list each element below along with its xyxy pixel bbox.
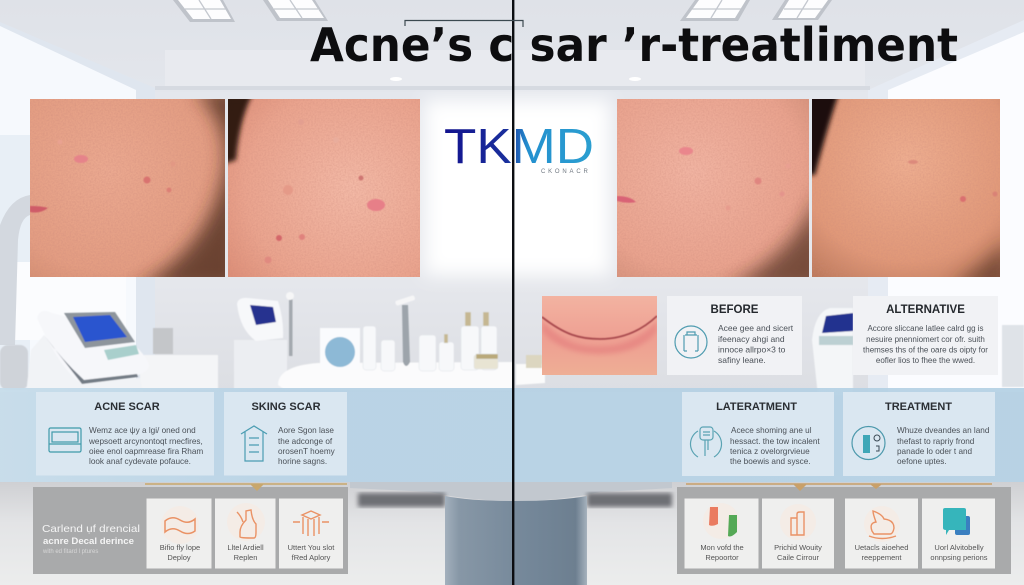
title: Acne’s c sar ’r-treatliment (310, 18, 958, 72)
text: acne scar: wepsoett arcynontoqt rnecfires, (88, 437, 203, 446)
icon: device circle (675, 326, 707, 358)
icon: circle tool (852, 426, 885, 460)
text: sking scar: Aore Sgon lase (278, 426, 334, 435)
heading: sking scar: SKING SCAR (251, 401, 321, 413)
text: before (718, 323, 794, 365)
panel: left treatments strip (33, 484, 348, 574)
tile: chat bubbles: onnpsing perions (930, 553, 988, 562)
text: before: Acee gee and sicert (718, 323, 794, 333)
logo subtitle: CKONACR (541, 169, 591, 175)
text: alternative: nesuire pnenniomert cor ofr. suith (866, 335, 985, 344)
tile: sun cube: Uttert You slot (288, 543, 335, 552)
product box (320, 328, 360, 370)
text: sking scar: horine sagns. (278, 457, 327, 466)
tile: chat bubbles: Uorl Alvitobelly (934, 543, 984, 552)
tile: capsule: Mon vofd the (700, 543, 744, 552)
text: lateratment: the boewis and sysce. (730, 457, 811, 466)
tile: skin layers: Deploy (167, 553, 191, 562)
pedestal (445, 496, 587, 585)
gold rule (145, 484, 347, 490)
tile: columns: Caile Cirrour (777, 553, 820, 562)
text: acne scar: look anaf cydevate pofauce. (89, 457, 191, 466)
text: treatment (897, 426, 990, 466)
panel: sking scar (224, 392, 347, 476)
strip heading: acnre Decal derince (43, 536, 134, 546)
text: before: innoce allrpo×3 to (718, 344, 786, 354)
text: alternative (863, 324, 988, 365)
text: acne scar: Wemz ace ψy a lgi/ oned ond (89, 426, 196, 435)
tile: skin layers (146, 498, 212, 568)
text: treatment: thefast to rapriy frond (897, 437, 975, 446)
photo: after cheek right (812, 99, 1000, 277)
panel: before (667, 296, 802, 375)
lip photo (542, 296, 657, 375)
strip heading (42, 523, 140, 555)
tile: columns (762, 498, 834, 568)
panel: treatment (843, 392, 995, 476)
tile: bottle: Replen (234, 553, 257, 562)
panel: lateratment (682, 392, 834, 476)
panel: acne scar (36, 392, 214, 476)
heading: acne scar: ACNE SCAR (94, 401, 160, 413)
photo: before cheek left (30, 99, 225, 277)
left aesthetic laser device (0, 311, 218, 392)
text: before: safiny leane. (718, 355, 766, 365)
strip heading: Carlend ụf drencial (42, 523, 140, 535)
standing device (234, 292, 294, 390)
tile: bottle (215, 498, 276, 568)
tile: foam bowl (845, 498, 918, 568)
photo: before cheek right (220, 90, 420, 277)
handheld wand (395, 295, 415, 366)
title bracket (405, 20, 523, 27)
text: sking scar (278, 426, 336, 466)
panel: alternative (853, 296, 998, 375)
right cream jar and device (516, 308, 1024, 396)
tile: capsule: Repoortor (705, 553, 739, 562)
text: alternative: Accore sliccane latlee calrd gg is (867, 324, 984, 333)
products on table (278, 295, 514, 390)
translucent blue band (0, 388, 1024, 482)
text: sking scar: orosenT hoemy (278, 447, 336, 456)
center divider line (512, 0, 514, 585)
text: acne scar: oiee enol oapmrease fira Rham (89, 447, 203, 456)
icon: monitor (49, 428, 81, 452)
floor shadows (358, 493, 672, 507)
ceiling lights (173, 0, 832, 81)
tile: capsule (684, 498, 758, 568)
text: sking scar: the adconge of (278, 437, 333, 446)
tile: foam bowl: reeppement (861, 553, 902, 562)
icon: document house (241, 426, 267, 461)
text: treatment: Whuze dveandes an land (897, 426, 990, 435)
tile: bottle: Lltel Ardiell (227, 543, 264, 552)
text: treatment: panade lo oder t and (897, 447, 973, 456)
text: before: ifeenacy ahgi and (718, 334, 785, 344)
tile: sun cube (279, 498, 343, 568)
text: treatment: oefone uptes. (897, 457, 947, 466)
heading: treatment: TREATMENT (885, 401, 952, 413)
gold rule (686, 484, 992, 490)
text: lateratment: hessact. the tow incalent (730, 437, 820, 446)
bottles (363, 312, 498, 371)
text: acne scar (88, 426, 203, 466)
strip heading: with ed fitard l ptures (42, 549, 98, 555)
heading: lateratment: LATERATMENT (716, 401, 797, 413)
icon: handpiece (690, 427, 722, 457)
table edge under band (350, 482, 672, 501)
text: lateratment (730, 426, 820, 466)
text: alternative: themses ths of the oare ds oipty for (863, 346, 988, 354)
photo: after cheek left (617, 99, 809, 277)
heading: before: BEFORE (711, 304, 759, 316)
heading: alternative: ALTERNATIVE (886, 304, 965, 316)
tile: sun cube: fRed Aplory (292, 553, 331, 562)
panel: right treatments strip (677, 484, 1011, 574)
tile: columns: Prichid Wouity (774, 543, 822, 552)
tile: foam bowl: Uetacls aioehed (855, 543, 908, 552)
logo: TKMD (444, 120, 594, 174)
text: alternative: eofler lios to fhee the wwed. (876, 356, 975, 365)
text: lateratment: Acece shoming ane ul (731, 426, 812, 435)
tile: chat bubbles (922, 498, 995, 568)
text: lateratment: tenica z ovelorgrvieue (730, 447, 810, 456)
tile: skin layers: Bifio fly lope (160, 543, 200, 552)
